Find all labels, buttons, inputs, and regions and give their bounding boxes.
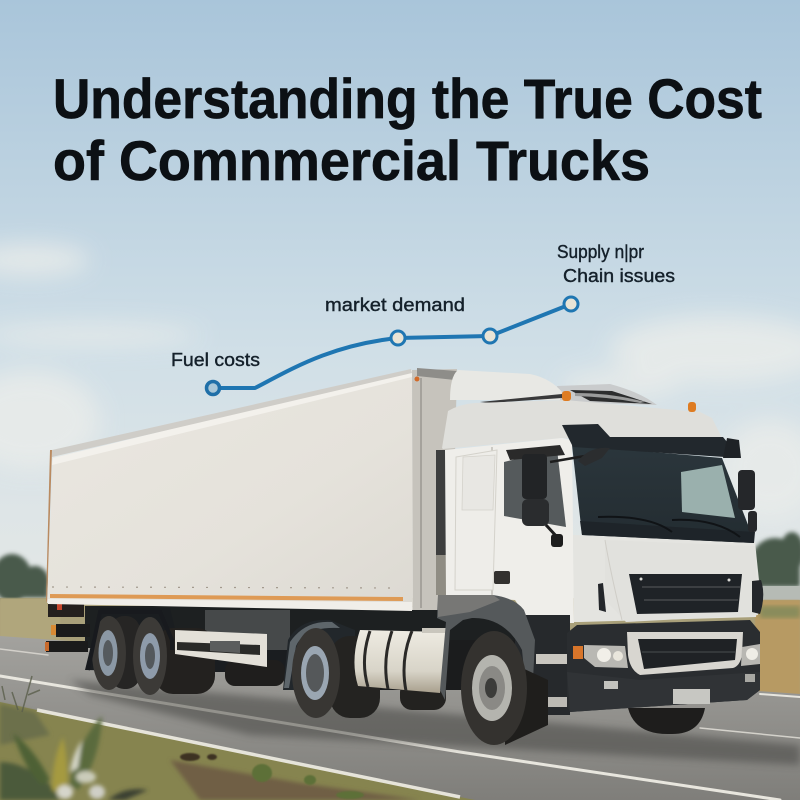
fuel tank	[354, 628, 448, 693]
orange stripe	[50, 594, 403, 601]
bumper	[567, 620, 760, 712]
title: of Comnmercial Trucks	[53, 129, 650, 192]
shadow under truck	[70, 680, 800, 765]
roof marker lights	[562, 391, 696, 412]
title: Understanding the True Cost	[53, 67, 762, 130]
wheel arch and steps	[437, 595, 570, 715]
sky background	[0, 0, 800, 640]
trailer undercarriage	[45, 603, 570, 690]
road markings	[0, 649, 800, 800]
rear cab dark gap	[436, 450, 452, 555]
mirrors	[522, 448, 757, 547]
clouds	[0, 244, 800, 520]
rear wheels	[88, 612, 285, 695]
roadside grass	[0, 676, 475, 800]
label: supply chain issues: Chain issues	[563, 265, 675, 286]
title	[53, 67, 762, 192]
trailer front frame	[412, 369, 457, 610]
drive wheel	[283, 620, 446, 718]
node: fuel costs	[206, 382, 220, 394]
trend line chart	[206, 297, 578, 394]
label: market demand: market demand	[325, 294, 465, 315]
road	[0, 636, 800, 800]
door window	[504, 449, 566, 527]
label: supply chain issues	[557, 241, 675, 286]
truck	[45, 368, 763, 745]
trailer box side	[47, 370, 413, 610]
cab roof	[442, 400, 726, 449]
front wheel	[461, 631, 705, 745]
sun visor	[562, 424, 740, 458]
roof fairing	[450, 370, 657, 405]
foreground plant	[0, 716, 148, 800]
node: third point	[483, 329, 497, 343]
cab front panel	[573, 535, 760, 622]
label: fuel costs: Fuel costs	[171, 349, 260, 370]
windshield	[572, 445, 754, 543]
distant treeline and fields	[0, 532, 800, 708]
upper grille	[629, 574, 742, 614]
node: market demand	[391, 331, 405, 345]
label: supply chain issues: Supply n|pr	[557, 241, 644, 262]
node: supply chain	[564, 297, 578, 311]
cab door body	[445, 438, 574, 623]
side guard	[175, 630, 267, 667]
